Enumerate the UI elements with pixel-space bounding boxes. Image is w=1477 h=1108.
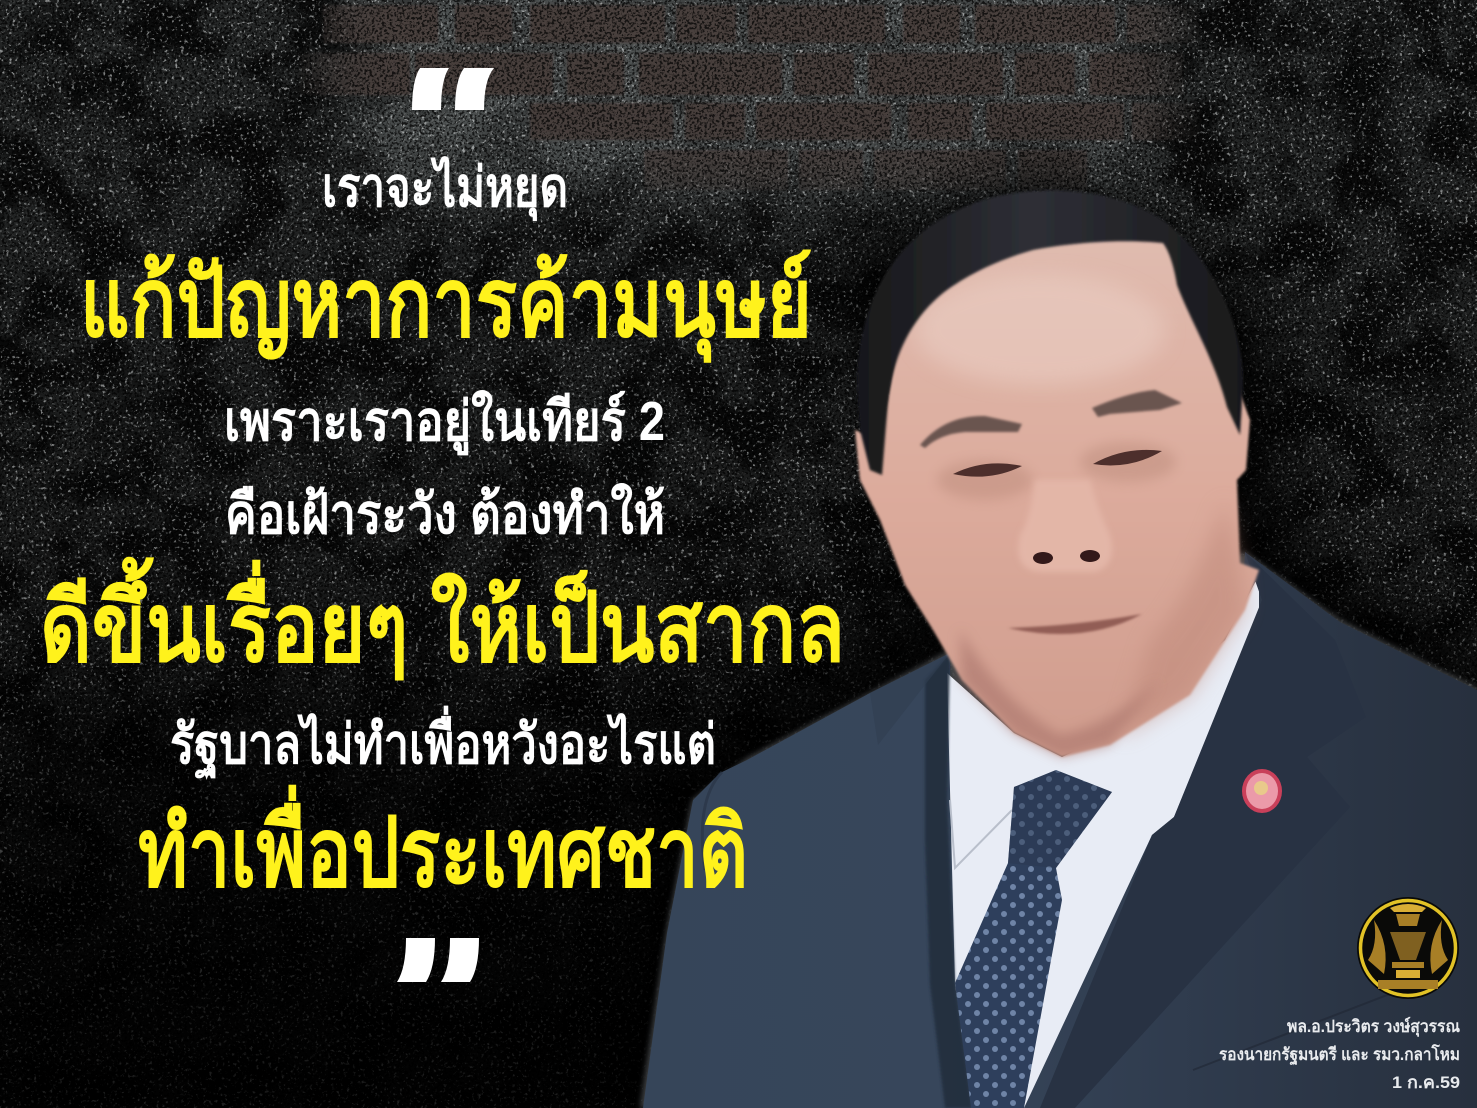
body glow [640, 552, 1477, 1108]
portrait: man in dark suit [620, 170, 1477, 1108]
forehead highlight [915, 275, 1165, 385]
quote line 5 highlight: ดีขึ้นเรื่อยๆ ให้เป็นสากล [40, 556, 845, 682]
breast pocket [1193, 990, 1400, 1070]
right lapel [1040, 552, 1366, 1108]
lapel pin [1242, 769, 1282, 813]
quote line 2 highlight: แก้ปัญหาการค้ามนุษย์ [80, 248, 812, 364]
brick courses [300, 5, 1200, 190]
quote line 4: คือเฝ้าระวัง ต้องทำให้ [225, 482, 665, 545]
left eye [953, 463, 1022, 477]
emblem: royal seal [1357, 897, 1459, 999]
hair [857, 190, 1243, 475]
left eyebrow [920, 416, 1022, 448]
right eyebrow [1092, 390, 1182, 417]
quote line 1: เราจะไม่หยุด [322, 155, 568, 222]
suit jacket [643, 552, 1477, 1108]
quote line 3: เพราะเราอยู่ในเทียร์ 2 [224, 389, 665, 456]
quote line 7 highlight: ทำเพื่อประเทศชาติ [138, 784, 748, 907]
right eye [1093, 450, 1162, 465]
neck and face [855, 225, 1259, 757]
shirt [947, 575, 1259, 1108]
left lapel shading [925, 653, 972, 1108]
speaker name: พล.อ.ประวิตร วงษ์สุวรรณ [1287, 1016, 1460, 1037]
seal ornament [1368, 904, 1448, 989]
nose [1018, 480, 1112, 572]
shoulder seam [702, 772, 722, 870]
opening quotation mark [412, 68, 494, 110]
tie [955, 770, 1112, 1108]
collar fold [950, 800, 1012, 868]
mouth [1008, 614, 1142, 634]
eye sockets shading [937, 460, 1033, 500]
credit text block [1219, 1016, 1460, 1092]
dark halo behind figure [620, 170, 1477, 1108]
date: 1 ก.ค.59 [1392, 1073, 1460, 1092]
left lapel notch line [870, 653, 950, 745]
face shading [1120, 500, 1245, 738]
closing quotation mark [397, 938, 479, 982]
quote line 6: รัฐบาลไม่ทำเพื่อหวังอะไรแต่ [170, 705, 716, 780]
